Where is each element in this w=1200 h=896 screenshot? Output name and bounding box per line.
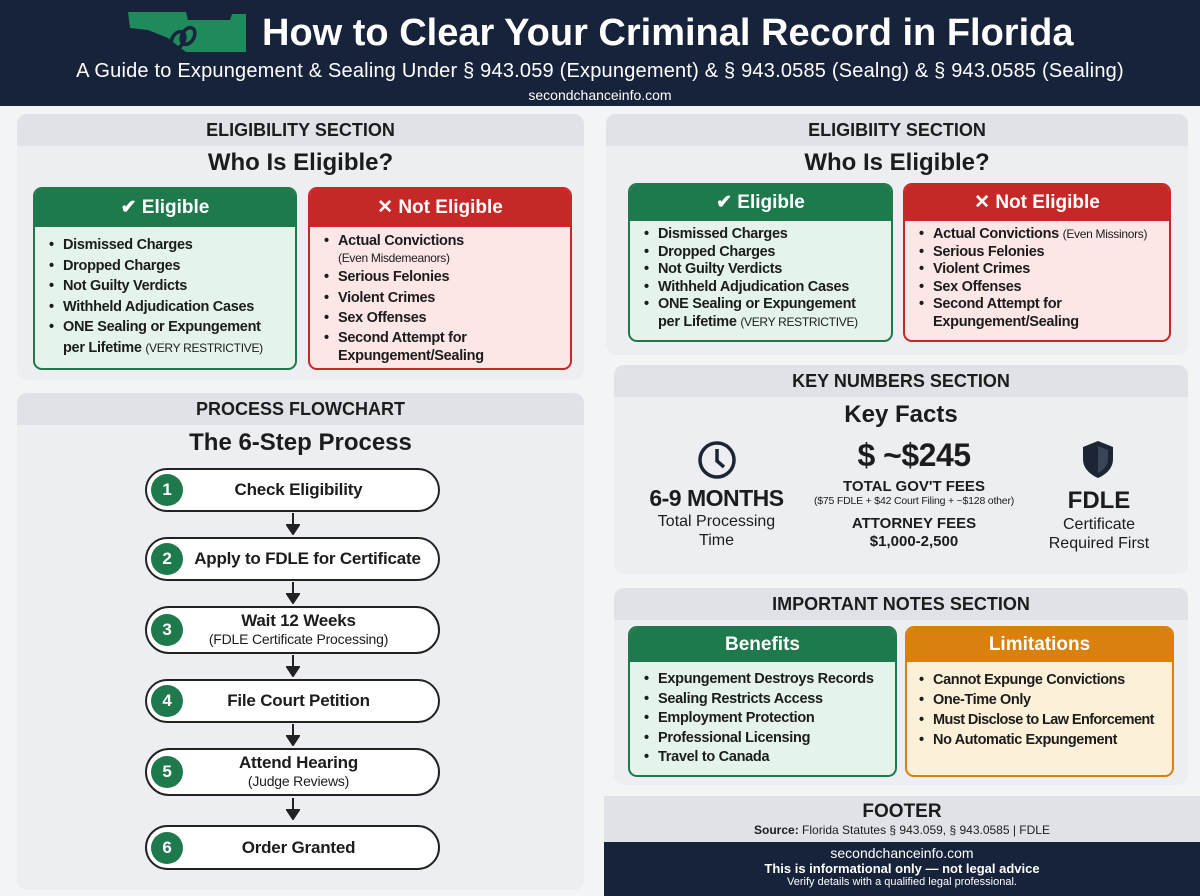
box: benefits: Benefits: [725, 634, 800, 655]
heading: [606, 114, 1188, 146]
heading: PROCESS FLOWCHART: [196, 399, 405, 419]
box: eligible: Withheld Adjudication Cases: [658, 278, 849, 294]
box: limitations: Must Disclose to Law Enforcement: [933, 712, 1154, 728]
box: eligible: ✔ Eligible: [121, 197, 209, 218]
panel: important notes: [614, 588, 1188, 785]
box: benefits: [628, 626, 897, 777]
box: eligible: [33, 187, 297, 370]
box: eligible: Dismissed Charges: [63, 237, 192, 253]
disclaimer: [604, 842, 1200, 896]
icon: shield: [1083, 441, 1113, 478]
box: benefits: Expungement Destroys Records: [658, 671, 874, 687]
heading: KEY NUMBERS SECTION: [792, 371, 1010, 391]
step 6: 6: [162, 838, 172, 856]
box: not eligible: Violent Crimes: [933, 261, 1030, 277]
stat: fees: ($75 FDLE + $42 Court Filing + ~$128 other): [814, 495, 1014, 507]
arrow: [286, 655, 300, 677]
box: not eligible: Serious Felonies: [933, 244, 1044, 260]
step 5: [145, 748, 440, 796]
subheading: Key Facts: [844, 401, 958, 428]
stat: FDLE: Required First: [1049, 535, 1149, 552]
panel: process flowchart: [17, 393, 584, 890]
box: eligible: ONE Sealing or Expungement: [658, 296, 856, 312]
panel: left eligibility: [17, 114, 584, 380]
disclaimer: secondchanceinfo.com: [830, 845, 974, 861]
box: eligible: ONE Sealing or Expungement: [63, 319, 261, 335]
heading: [614, 365, 1188, 397]
box: not eligible: Sex Offenses: [933, 278, 1021, 294]
box: not eligible: ✕ Not Eligible: [974, 192, 1100, 213]
box: not eligible: (Even Misdemeanors): [338, 251, 450, 265]
step 2: Apply to FDLE for Certificate: [194, 549, 421, 568]
step 5: (Judge Reviews): [248, 773, 349, 789]
box: not eligible: Serious Felonies: [338, 269, 449, 285]
box: eligible: Not Guilty Verdicts: [63, 278, 187, 294]
box: limitations: [905, 626, 1174, 777]
step 5: Attend Hearing: [239, 753, 358, 772]
arrow: [286, 798, 300, 820]
box: benefits: Employment Protection: [658, 710, 814, 726]
arrow: [286, 582, 300, 604]
icon: clock: [698, 441, 736, 479]
step 6: Order Granted: [242, 838, 355, 856]
box: not eligible: ✕ Not Eligible: [377, 197, 503, 218]
box: not eligible: Actual Convictions (Even Missinors): [933, 226, 1147, 242]
subtitle: A Guide to Expungement & Sealing Under § 943.059 (Expungement) & § 943.0585 (Sealng) & § 943.0585 (Sealing): [76, 60, 1124, 82]
panel: right eligibility: [606, 114, 1188, 355]
subheading: The 6-Step Process: [189, 429, 412, 456]
heading: IMPORTANT NOTES SECTION: [772, 594, 1030, 614]
stat: fees: TOTAL GOV'T FEES: [843, 478, 985, 495]
step 3: (FDLE Certificate Processing): [209, 631, 388, 647]
box: not eligible: Second Attempt for: [338, 330, 467, 346]
box: eligible: ✔ Eligible: [716, 192, 805, 213]
step 3: 3: [162, 620, 172, 639]
footer: [604, 796, 1200, 896]
icon: florida hands logo: [128, 12, 246, 52]
footer heading: FOOTER: [862, 801, 942, 822]
step 3: [145, 606, 440, 654]
box: not eligible: [903, 183, 1171, 342]
box: benefits: Professional Licensing: [658, 730, 810, 746]
heading: ELIGIBILITY SECTION: [206, 120, 395, 140]
panel: key numbers: [614, 365, 1188, 574]
stat: months: [649, 485, 784, 549]
box: eligible: per Lifetime (VERY RESTRICTIVE): [658, 314, 858, 330]
step 4: 4: [162, 691, 172, 710]
heading: [17, 114, 584, 146]
box: eligible: per Lifetime (VERY RESTRICTIVE): [63, 340, 263, 356]
box: limitations: No Automatic Expungement: [933, 732, 1117, 748]
step 4: File Court Petition: [227, 691, 370, 710]
stat: FDLE: Certificate: [1063, 516, 1135, 533]
disclaimer: Verify details with a qualified legal professional.: [787, 876, 1017, 888]
box: eligible: Withheld Adjudication Cases: [63, 298, 254, 314]
box: eligible: Dropped Charges: [63, 258, 180, 274]
stat: fees: $1,000-2,500: [870, 533, 958, 550]
arrow: [286, 724, 300, 746]
box: eligible: Dismissed Charges: [658, 226, 788, 242]
step 5: 5: [162, 762, 172, 781]
subheading: Who Is Eligible?: [208, 149, 393, 176]
box: benefits: Travel to Canada: [658, 749, 769, 765]
box: not eligible: Actual Convictions: [338, 233, 464, 249]
heading: [614, 588, 1188, 620]
stat: FDLE: FDLE: [1068, 487, 1130, 514]
stat: months: Total Processing: [658, 513, 775, 530]
step 3: Wait 12 Weeks: [241, 611, 356, 630]
box: not eligible: Violent Crimes: [338, 290, 435, 306]
stat: FDLE: [1049, 487, 1150, 552]
box: limitations: Limitations: [989, 634, 1090, 655]
stat: months: 6-9 MONTHS: [649, 485, 784, 511]
disclaimer: This is informational only — not legal advice: [764, 861, 1040, 876]
step 2: [145, 537, 440, 581]
step 6: [145, 825, 440, 870]
box: not eligible: Expungement/Sealing: [933, 314, 1079, 330]
box: not eligible: Expungement/Sealing: [338, 348, 484, 364]
box: limitations: One-Time Only: [933, 692, 1031, 708]
header: [0, 0, 1200, 106]
subheading: Who Is Eligible?: [804, 149, 990, 176]
stat: fees: $ ~$245: [857, 437, 971, 473]
title: How to Clear Your Criminal Record in Florida: [262, 12, 1074, 54]
box: not eligible: [308, 187, 572, 370]
stat: months: Time: [699, 532, 734, 549]
box: benefits: Sealing Restricts Access: [658, 690, 823, 706]
step 1: Check Eligibility: [235, 480, 362, 499]
box: not eligible: Second Attempt for: [933, 296, 1062, 312]
box: not eligible: Sex Offenses: [338, 310, 426, 326]
step 1: 1: [162, 480, 172, 499]
heading: ELIGIBIITY SECTION: [808, 120, 986, 140]
source: Source: Florida Statutes § 943.059, § 943.0585 | FDLE: [754, 823, 1050, 837]
step 4: [145, 679, 440, 723]
url: secondchanceinfo.com: [528, 87, 672, 103]
box: eligible: Dropped Charges: [658, 244, 775, 260]
box: eligible: [628, 183, 893, 342]
step 2: 2: [162, 549, 172, 568]
box: limitations: Cannot Expunge Convictions: [933, 672, 1125, 688]
stat: fees: [814, 437, 1014, 550]
arrow: [286, 513, 300, 535]
box: eligible: Not Guilty Verdicts: [658, 261, 782, 277]
stat: fees: ATTORNEY FEES: [852, 515, 976, 532]
step 1: [145, 468, 440, 512]
heading: [17, 393, 584, 425]
